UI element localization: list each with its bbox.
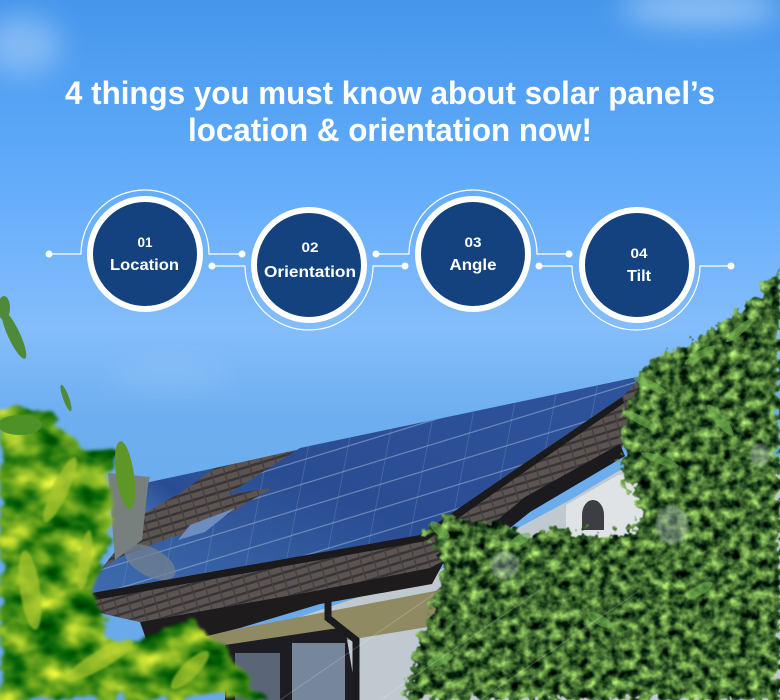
title: location & orientation now! — [188, 112, 592, 148]
tree: right foliage — [405, 268, 780, 700]
step 1: location: Location — [110, 257, 179, 274]
step 4: tilt: Tilt — [627, 268, 652, 285]
step 2: orientation: Orientation — [264, 264, 356, 281]
clouds — [0, 0, 780, 391]
solar panels: small upper array — [80, 468, 215, 543]
gable fascia — [436, 444, 625, 566]
chimney — [108, 473, 150, 560]
downpipe — [328, 600, 356, 700]
skylight — [178, 508, 235, 540]
panel shadow strip — [92, 397, 624, 600]
icon: roof vent — [582, 500, 604, 530]
title — [65, 75, 715, 148]
step 2: orientation: 02 — [302, 239, 319, 255]
top left leaves — [0, 296, 139, 510]
reflection patch — [119, 536, 181, 588]
step 1: location: 01 — [138, 234, 153, 250]
step 2: orientation — [208, 210, 408, 330]
step diagram — [46, 190, 734, 330]
eave and gutter — [140, 560, 445, 650]
leaf clusters — [425, 315, 756, 669]
step 4: tilt: 04 — [630, 245, 648, 261]
gable wall — [566, 470, 700, 560]
step 3: angle: 03 — [464, 234, 482, 250]
faint light streaks — [280, 590, 640, 700]
step 3: angle: Angle — [450, 257, 497, 274]
solar panels: main array — [88, 376, 642, 593]
title: 4 things you must know about solar panel’s — [65, 75, 715, 111]
step 4: tilt — [536, 210, 734, 330]
wall gaps between leaves — [491, 443, 770, 579]
bright leaves — [15, 454, 214, 694]
step 3: angle — [372, 190, 572, 309]
house with solar roof — [80, 376, 780, 700]
tree: left foliage — [0, 296, 262, 700]
tiled roof — [85, 376, 642, 622]
beige wall band — [180, 590, 440, 660]
wall — [230, 470, 780, 700]
step 1: location — [46, 190, 246, 309]
window — [225, 627, 357, 700]
